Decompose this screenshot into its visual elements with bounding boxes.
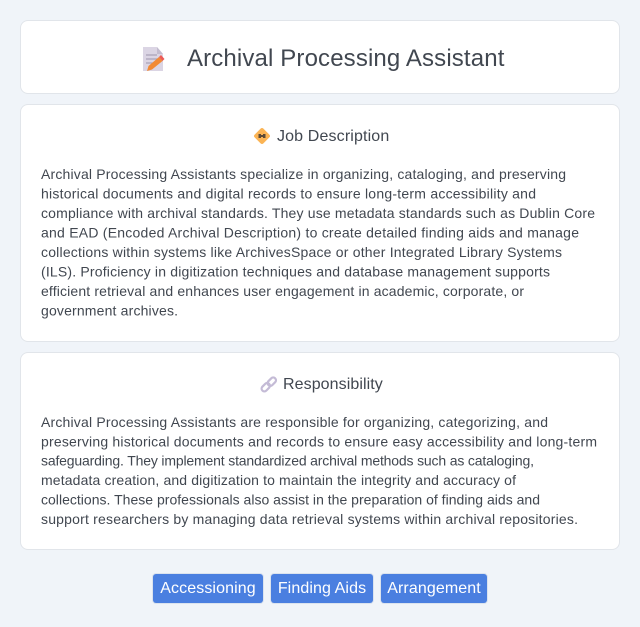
- icon: document with pencil: [143, 47, 164, 71]
- panel: responsibility: [20, 352, 620, 550]
- text: responsibility paragraph: Archival Processing Assistants are responsible for organizing, categorizing, and: [41, 414, 548, 430]
- tag: finding aids: [271, 574, 373, 603]
- text: job description paragraph: [41, 166, 595, 318]
- text: responsibility paragraph: collections. These professionals also assist in the preparation of finding aids and: [41, 492, 540, 508]
- text: job description paragraph: and EAD (Encoded Archival Description) to create detailed finding aids and manage: [41, 224, 579, 240]
- heading: responsibility: Responsibility: [283, 376, 383, 393]
- text: responsibility paragraph: support researchers by managing data retrieval systems within archival repositories.: [41, 511, 578, 527]
- text: job description paragraph: Archival Processing Assistants specialize in organizing, cataloging, and preserving: [41, 166, 566, 182]
- text: job description paragraph: government archives.: [41, 302, 178, 318]
- tag: accessioning: [153, 574, 263, 603]
- text: responsibility paragraph: safeguarding. They implement standardized archival methods such as cataloging,: [41, 452, 534, 468]
- panel: job description: [20, 104, 620, 342]
- text: job description paragraph: efficient retrieval and enhances user engagement in academic, corporate, or: [41, 283, 524, 299]
- text: job description paragraph: (ILS). Proficiency in digitization techniques and database management supports: [41, 264, 550, 280]
- text: responsibility paragraph: metadata creation, and digitization to maintain the integrity and accuracy of: [41, 472, 516, 488]
- icon: orange diamond: [254, 128, 270, 144]
- tag: arrangement: Arrangement: [387, 580, 481, 597]
- title: Archival Processing Assistant: [187, 45, 505, 72]
- heading: job description: Job Description: [277, 128, 389, 145]
- text: responsibility paragraph: preserving historical documents and records to ensure easy accessibility and long-term: [41, 434, 597, 450]
- text: job description paragraph: historical documents and digital records to ensure long-term accessibility and: [41, 186, 536, 202]
- tag: finding aids: Finding Aids: [278, 580, 366, 597]
- panel: title header: [20, 20, 620, 94]
- tag: arrangement: [381, 574, 487, 603]
- text: responsibility paragraph: [41, 414, 597, 527]
- tag: accessioning: Accessioning: [160, 580, 256, 597]
- text: job description paragraph: compliance with archival standards. They use metadata standards such as Dublin Core: [41, 205, 595, 221]
- text: job description paragraph: collections within systems like ArchivesSpace or other Integrated Library Systems: [41, 244, 562, 260]
- icon: chain link: [260, 376, 277, 392]
